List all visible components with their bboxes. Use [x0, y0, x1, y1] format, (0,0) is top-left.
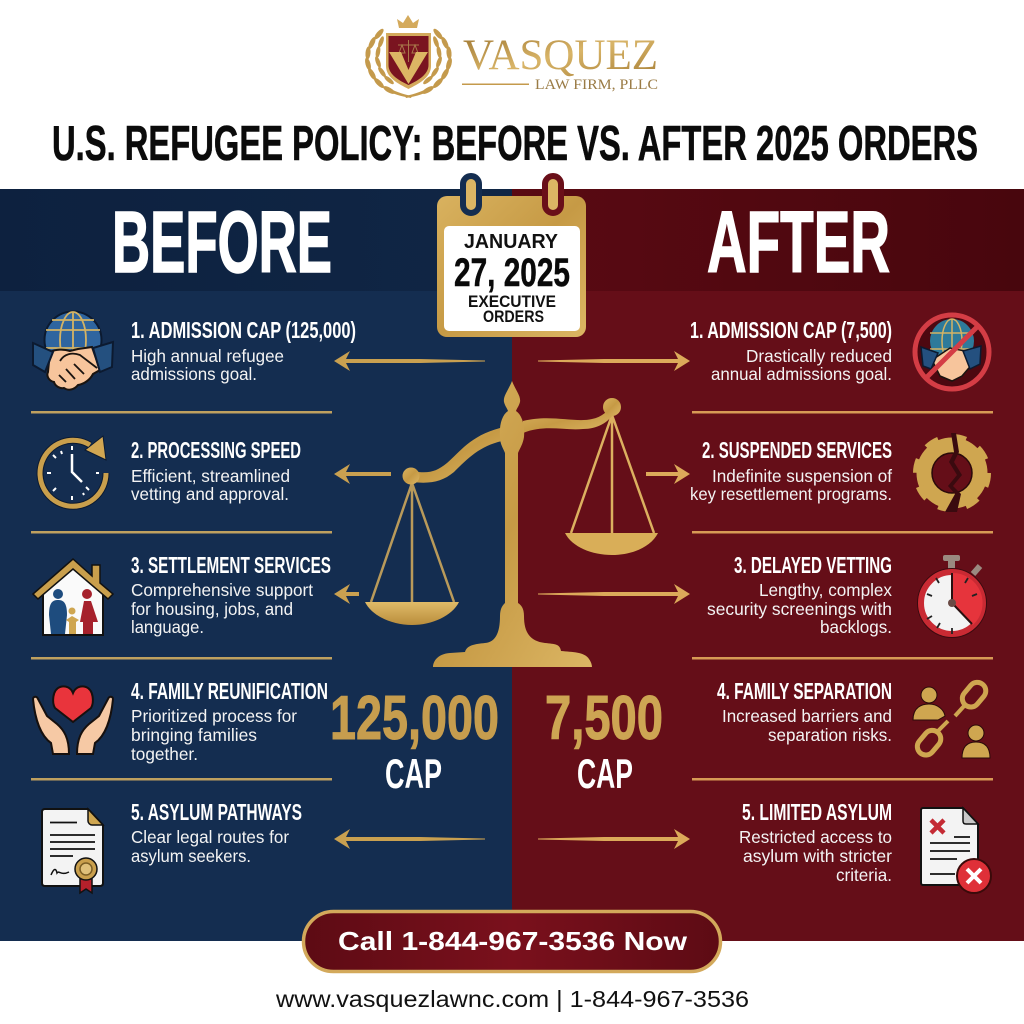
item: admission cap 125,000 — [33, 312, 356, 390]
logo subtitle: LAW FIRM, PLLC — [535, 77, 658, 93]
heading: 4. FAMILY REUNIFICATION — [131, 678, 328, 704]
heading: 4. FAMILY SEPARATION — [717, 678, 892, 704]
stat label: CAP — [577, 750, 633, 797]
description: Efficient, streamlined — [131, 466, 290, 486]
icon: crown — [397, 15, 419, 28]
description: key resettlement programs. — [690, 484, 892, 504]
panel: after items — [690, 315, 991, 893]
description: Indefinite suspension of — [712, 466, 892, 486]
description: admissions goal. — [131, 364, 257, 384]
scales of justice — [365, 381, 658, 667]
heading: 1. ADMISSION CAP (7,500) — [690, 317, 892, 343]
item: family reunification — [33, 678, 328, 764]
description: for housing, jobs, and — [131, 599, 293, 619]
description — [131, 706, 297, 764]
stat number: 125,000 — [330, 684, 499, 753]
call to action button — [304, 912, 720, 972]
stat: 125,000 cap — [330, 684, 499, 797]
logo rule — [462, 84, 529, 85]
description: Drastically reduced — [746, 346, 892, 366]
stat label: CAP — [385, 750, 442, 797]
item: limited asylum — [739, 799, 991, 893]
heading: 1. ADMISSION CAP (125,000) — [131, 317, 356, 343]
heading: 3. SETTLEMENT SERVICES — [131, 552, 331, 578]
description: separation risks. — [768, 725, 892, 745]
icon: broken gear — [917, 433, 987, 512]
icon: rejected document — [921, 808, 991, 893]
heading: 2. PROCESSING SPEED — [131, 437, 301, 463]
description: vetting and approval. — [131, 484, 289, 504]
icon: prohibited globe handshake — [915, 315, 989, 389]
heading: 5. ASYLUM PATHWAYS — [131, 799, 302, 825]
calendar date: 27, 2025 — [454, 251, 570, 295]
description — [131, 827, 289, 866]
calendar month: JANUARY — [464, 231, 559, 253]
panel: before background — [0, 189, 512, 941]
heading: 3. DELAYED VETTING — [734, 552, 892, 578]
balance beam and stand — [402, 381, 621, 667]
description: asylum seekers. — [131, 846, 251, 866]
stat number: 7,500 — [545, 684, 663, 753]
description: Comprehensive support — [131, 580, 313, 600]
description: High annual refugee — [131, 346, 284, 366]
calendar page — [444, 226, 580, 331]
description: Prioritized process for — [131, 706, 297, 726]
icon: clock — [40, 436, 106, 506]
item: asylum pathways — [42, 799, 302, 893]
calendar: January 27, 2025 — [437, 176, 586, 337]
icon: hands and heart — [33, 686, 113, 754]
calendar caption line 2: ORDERS — [483, 308, 544, 326]
before header band — [0, 189, 512, 291]
description — [711, 346, 892, 384]
heading: 2. SUSPENDED SERVICES — [702, 437, 892, 463]
item: admission cap 7,500 — [690, 315, 989, 389]
heading: before: BEFORE — [112, 194, 332, 291]
description — [131, 346, 284, 384]
calendar ring right — [545, 176, 561, 213]
description — [739, 827, 892, 885]
description — [131, 466, 290, 504]
arrows: after side — [538, 351, 690, 849]
description: language. — [131, 617, 204, 637]
icon: laurel wreath right — [405, 27, 453, 98]
description: backlogs. — [820, 617, 892, 637]
icon: shield — [386, 33, 431, 89]
description: security screenings with — [707, 599, 892, 619]
panel: before items — [33, 312, 356, 893]
description: Increased barriers and — [722, 706, 892, 726]
description: Clear legal routes for — [131, 827, 289, 847]
stat: 7,500 cap — [545, 684, 663, 797]
description: asylum with stricter — [743, 846, 892, 866]
description: Lengthy, complex — [759, 580, 892, 600]
icon: house with family — [33, 559, 113, 635]
heading: 5. LIMITED ASYLUM — [742, 799, 892, 825]
item: delayed vetting — [707, 552, 987, 638]
icon: globe handshake — [33, 312, 113, 390]
heading: after: AFTER — [707, 194, 890, 291]
description: annual admissions goal. — [711, 364, 892, 384]
description — [690, 466, 892, 504]
call to action button: Call 1-844-967-3536 Now — [338, 926, 688, 956]
after header band — [512, 189, 1024, 291]
description: criteria. — [836, 865, 892, 885]
icon: laurel wreath left — [364, 27, 412, 98]
icon: stopwatch — [917, 555, 987, 638]
panel: after background — [512, 189, 1024, 941]
icon: broken chain and people — [913, 679, 990, 759]
description: bringing families — [131, 725, 257, 745]
description — [131, 580, 313, 637]
description: Restricted access to — [739, 827, 892, 847]
description: together. — [131, 744, 198, 764]
footer contact line: www.vasquezlawnc.com | 1-844-967-3536 — [275, 986, 749, 1012]
description — [722, 706, 892, 745]
item: family separation — [717, 678, 990, 759]
icon: certificate — [42, 809, 103, 893]
item: settlement services — [33, 552, 331, 637]
item: suspended services — [690, 433, 987, 512]
calendar caption line 1: EXECUTIVE — [468, 293, 556, 311]
calendar body — [437, 196, 586, 337]
description — [707, 580, 892, 637]
logo wordmark: VASQUEZ — [463, 32, 658, 79]
calendar ring left — [463, 176, 479, 213]
item: processing speed — [40, 436, 301, 506]
left pan with strings — [365, 483, 459, 625]
logo: Vasquez Law Firm — [364, 15, 658, 98]
right pan with strings — [565, 415, 658, 555]
arrows: before side — [334, 351, 485, 849]
